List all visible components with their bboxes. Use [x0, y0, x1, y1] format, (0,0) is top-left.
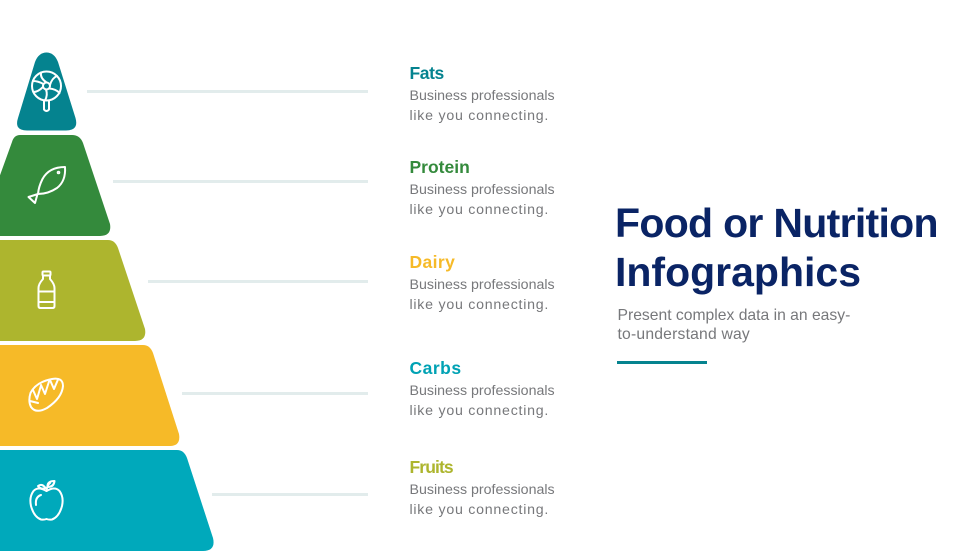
tier: dairy	[0, 240, 145, 341]
title	[615, 200, 938, 295]
label: fruits: Fruits	[410, 456, 453, 476]
description: fats: like you connecting.	[410, 108, 549, 124]
label: dairy: Dairy	[410, 252, 455, 272]
label: protein: Protein	[410, 156, 470, 176]
accent line	[617, 361, 706, 364]
icon: fish	[28, 167, 65, 203]
tier: protein	[0, 135, 110, 236]
icon: bottle	[38, 272, 54, 308]
tier: fruits	[0, 450, 214, 551]
description: fruits: Business professionals	[410, 482, 555, 498]
description: protein: Business professionals	[410, 182, 555, 198]
connector: dairy	[148, 280, 368, 283]
label: carbs: Carbs	[410, 358, 462, 378]
icon: apple	[30, 481, 63, 520]
tier: carbs	[0, 345, 179, 446]
description: fats	[410, 88, 555, 124]
description: fruits: like you connecting.	[410, 502, 549, 518]
icon: lollipop	[32, 72, 61, 111]
description: protein	[410, 182, 555, 218]
description: carbs: like you connecting.	[410, 402, 549, 418]
connector: fats	[87, 90, 368, 93]
title: Food or Nutrition	[615, 200, 938, 246]
description: dairy: like you connecting.	[410, 296, 549, 312]
connector: protein	[113, 180, 368, 183]
description: protein: like you connecting.	[410, 202, 549, 218]
description: fats: Business professionals	[410, 88, 555, 104]
connector: fruits	[212, 493, 368, 496]
subtitle: to-understand way	[618, 326, 750, 342]
description: dairy	[410, 277, 555, 312]
subtitle: Present complex data in an easy-	[618, 307, 850, 324]
description: carbs	[410, 383, 555, 418]
icon: bread	[29, 379, 63, 411]
title: Infographics	[615, 249, 861, 295]
description: fruits	[410, 482, 555, 518]
description: dairy: Business professionals	[410, 277, 555, 293]
label: fats: Fats	[410, 62, 444, 82]
tier: fats	[17, 52, 76, 130]
connector: carbs	[182, 392, 368, 395]
subtitle	[618, 307, 850, 342]
description: carbs: Business professionals	[410, 383, 555, 399]
